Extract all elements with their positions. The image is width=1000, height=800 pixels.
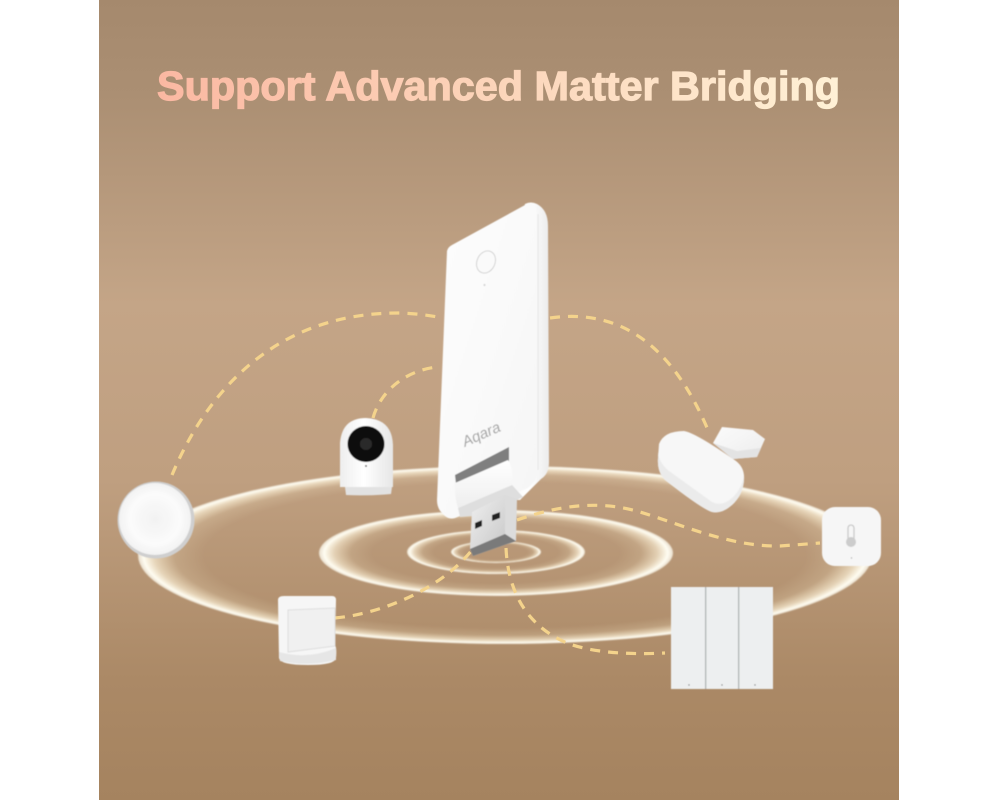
- device: camera hub: [340, 418, 393, 495]
- swivel flap: [455, 460, 512, 508]
- usb plug end: [470, 534, 516, 556]
- indicator dot: [484, 284, 486, 286]
- flap shadow on body: [458, 485, 523, 517]
- device: motion sensor: [278, 596, 336, 665]
- usb plug face: [470, 495, 505, 549]
- dongle side edge: [500, 202, 549, 500]
- swivel slot: [455, 447, 509, 484]
- device: triple wall switch: [671, 587, 773, 689]
- magnet cube: [713, 427, 765, 459]
- usb plug body: [470, 495, 517, 556]
- thermometer icon: [846, 525, 856, 547]
- camera lens: [348, 426, 384, 462]
- usb holes: [475, 512, 500, 529]
- dongle front face: [437, 204, 538, 518]
- sensor lens panel: [288, 608, 335, 652]
- sensor base: [279, 648, 336, 664]
- brand logo: Aqara: [459, 419, 503, 451]
- hub dongle: [437, 202, 549, 556]
- camera base: [345, 487, 392, 495]
- edge crease: [537, 214, 539, 470]
- title: Support Advanced Matter Bridging: [157, 63, 840, 109]
- dashed connection lines: [172, 313, 820, 654]
- button: [473, 248, 499, 276]
- device: door and window sensor: [658, 427, 765, 512]
- sensor main body: [658, 431, 744, 512]
- device: temperature sensor: [822, 507, 881, 566]
- concentric signal rings: [138, 466, 872, 644]
- background panel: [99, 0, 899, 800]
- device: round button: [118, 482, 194, 558]
